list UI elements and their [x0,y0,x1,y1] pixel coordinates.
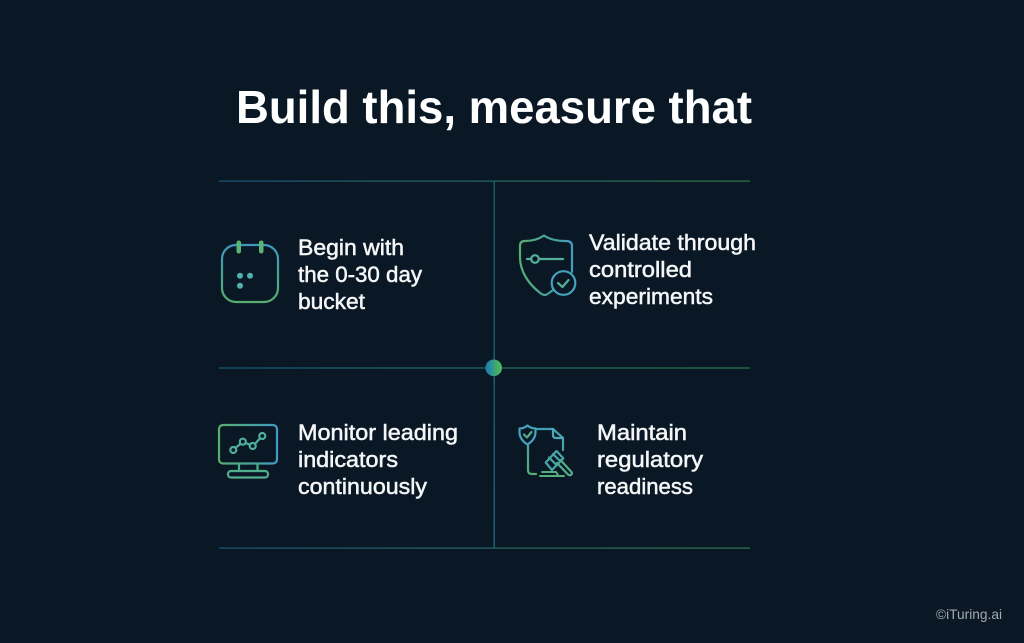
panel: monitor leading indicators continuously [219,420,458,499]
text: validate through controlled experiments [589,230,756,309]
icon: monitor with line chart [219,425,277,478]
title: Build this, measure that [236,81,752,133]
panel: maintain regulatory readiness [520,420,703,499]
panel: validate through controlled experiments [520,230,756,309]
text: begin with the 0-30 day bucket: Begin with [298,235,404,260]
watermark: ©iTuring.ai [936,606,1002,622]
text: monitor leading indicators continuously [298,420,458,499]
text: maintain regulatory readiness: readiness [597,474,693,499]
text: monitor leading indicators continuously: continuously [298,474,427,499]
text: maintain regulatory readiness [597,420,703,499]
text: begin with the 0-30 day bucket: bucket [298,289,365,314]
grid lines and center marker [219,180,750,549]
text: maintain regulatory readiness: Maintain [597,420,687,445]
text: validate through controlled experiments: experiments [589,284,713,309]
panel: begin with the 0-30 day bucket [222,235,422,314]
text: validate through controlled experiments: controlled [589,257,692,282]
text: validate through controlled experiments: Validate through [589,230,756,255]
text: begin with the 0-30 day bucket: the 0-30 day [298,262,422,287]
icon: shield with check [520,236,575,295]
text: begin with the 0-30 day bucket [298,235,422,314]
text: monitor leading indicators continuously: Monitor leading [298,420,458,445]
icon: calendar [222,240,278,302]
text: maintain regulatory readiness: regulatory [597,447,703,472]
icon: document with shield and gavel [520,426,572,476]
text: monitor leading indicators continuously: indicators [298,447,398,472]
